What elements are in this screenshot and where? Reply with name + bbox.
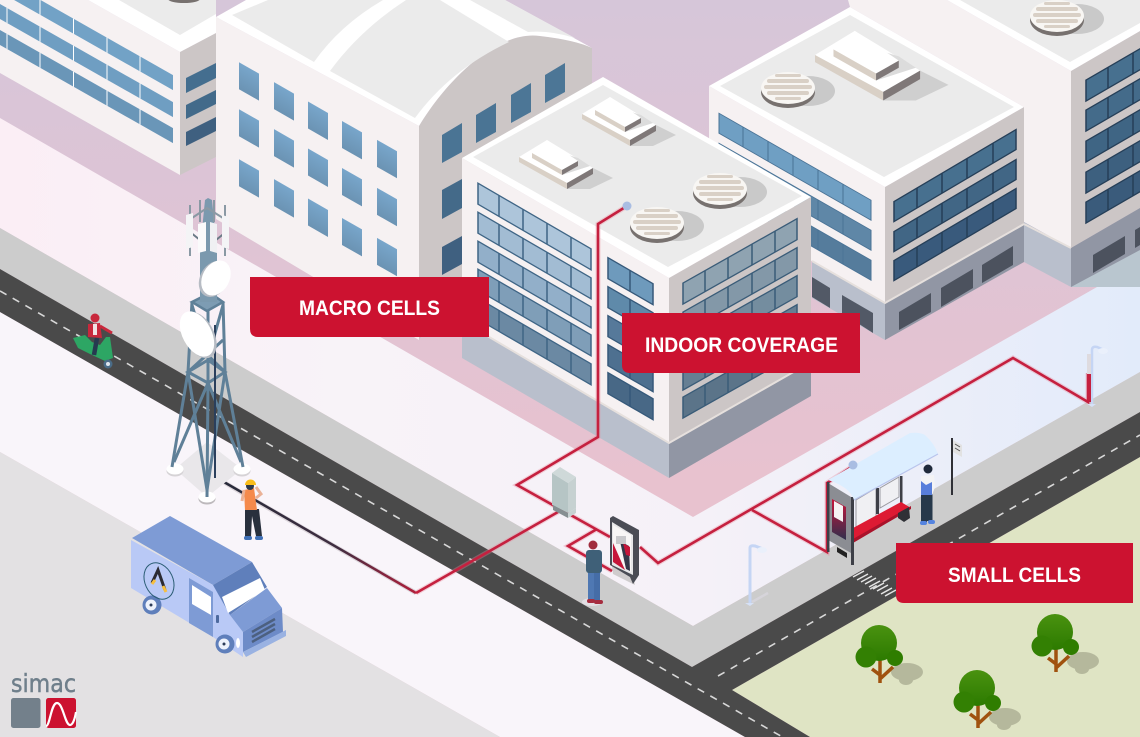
label: macro cells bbox=[250, 277, 489, 337]
worker in hard hat bbox=[242, 480, 263, 540]
simac logo bbox=[11, 669, 76, 728]
bus stop sign bbox=[951, 438, 962, 495]
plaza pavement bbox=[0, 118, 1140, 626]
grass park bbox=[732, 457, 1140, 737]
bus shelter bbox=[827, 433, 938, 565]
digital kiosk bbox=[610, 516, 639, 585]
label: macro cells: MACRO CELLS bbox=[299, 297, 440, 320]
simac logo: simac bbox=[11, 669, 76, 698]
roads bbox=[0, 269, 1140, 737]
sensor on central roof bbox=[622, 202, 632, 210]
building far right bbox=[848, 0, 1140, 287]
sidewalks bbox=[0, 228, 1140, 667]
label: indoor coverage: INDOOR COVERAGE bbox=[645, 334, 838, 357]
trees bbox=[856, 614, 1099, 730]
building right of centre bbox=[709, 7, 1071, 340]
arched building bbox=[216, 0, 592, 340]
label: small cells bbox=[896, 543, 1133, 603]
telecom tower bbox=[166, 198, 250, 504]
building top left bbox=[0, 0, 216, 175]
street lamp with small cell bbox=[1087, 347, 1108, 407]
label: small cells: SMALL CELLS bbox=[948, 564, 1081, 587]
bottom ground bbox=[0, 452, 500, 737]
label: indoor coverage bbox=[622, 313, 860, 373]
service van bbox=[131, 516, 286, 657]
sensor on bus shelter bbox=[848, 460, 858, 470]
red fibre cabling bbox=[217, 206, 1088, 593]
street cabinet bbox=[552, 467, 576, 518]
street lamp bbox=[745, 546, 768, 606]
lower pavement strip bbox=[0, 312, 745, 737]
person at kiosk bbox=[582, 540, 603, 606]
person with phone bbox=[920, 464, 935, 525]
central building bbox=[462, 77, 811, 478]
scooter rider bbox=[73, 314, 113, 368]
